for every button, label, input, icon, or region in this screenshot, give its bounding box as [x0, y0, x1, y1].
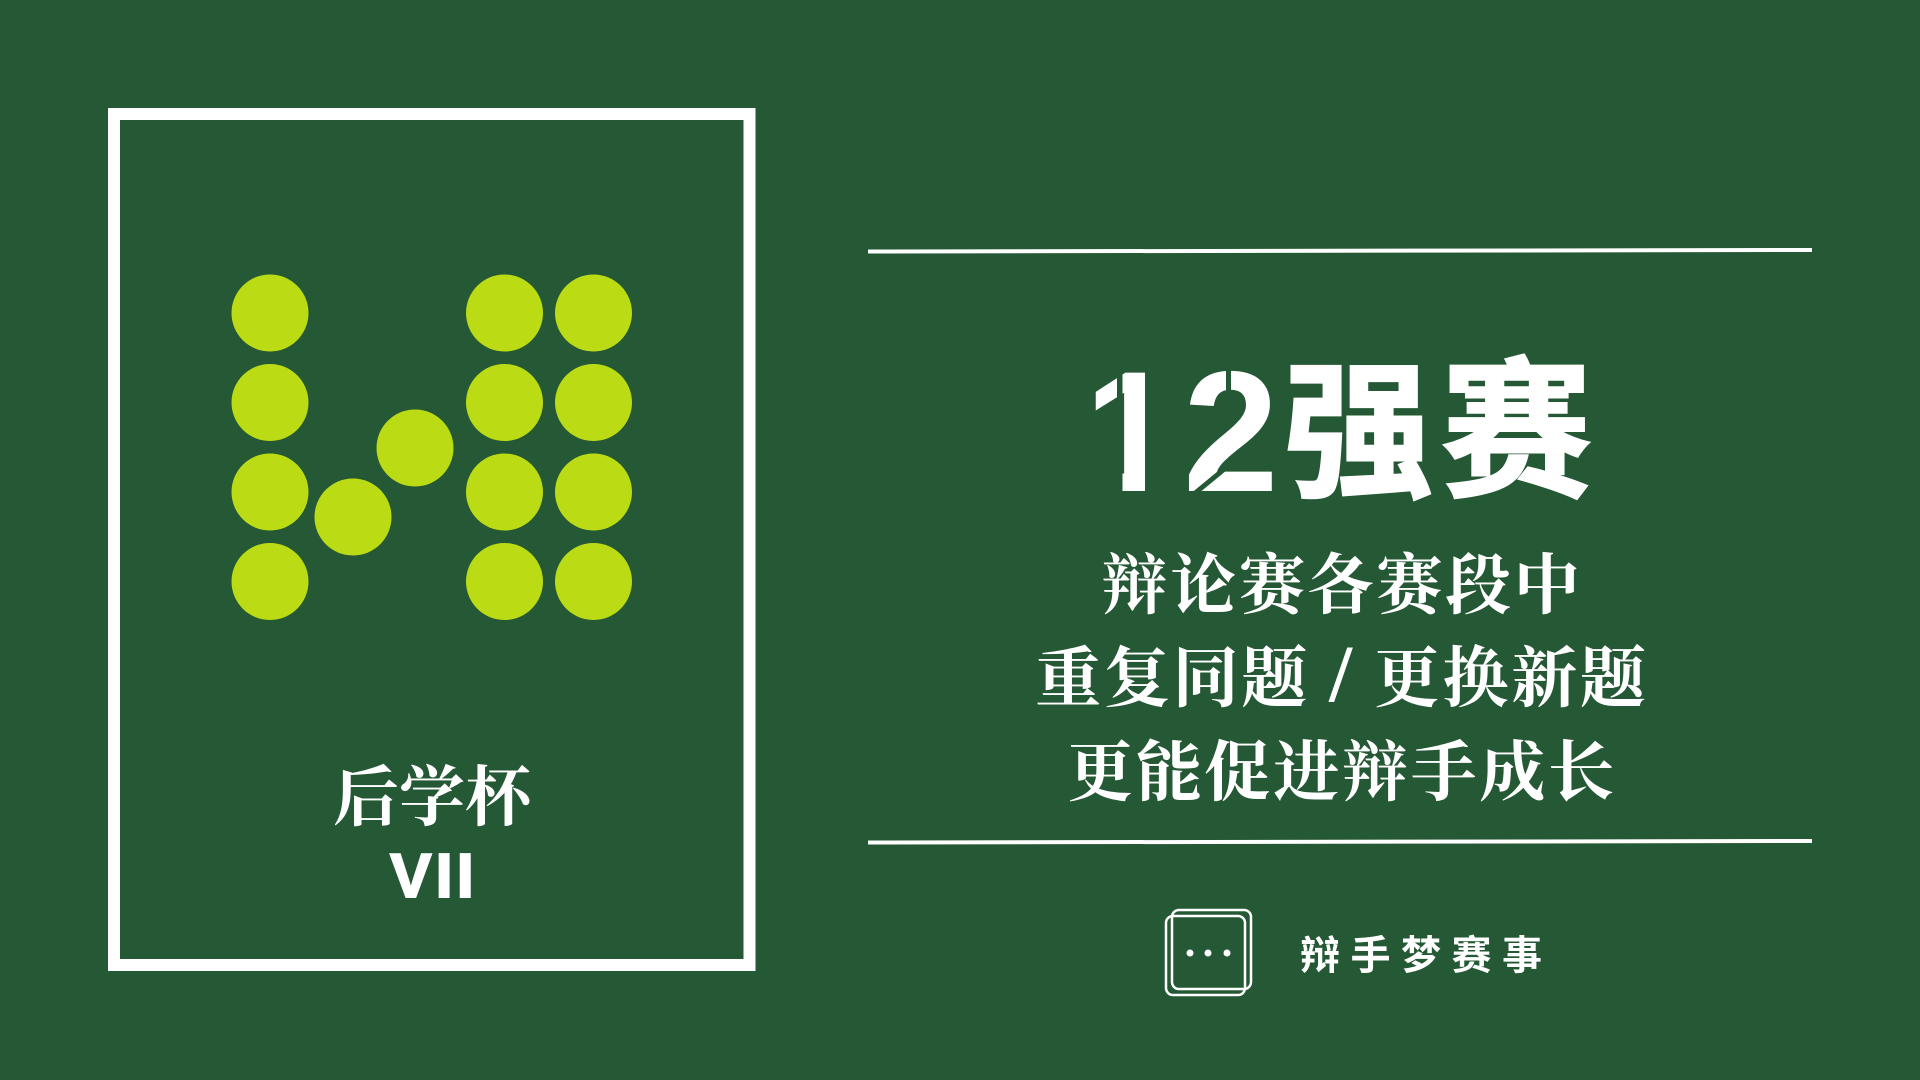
body text: 辩论赛各赛段中: [1102, 550, 1582, 623]
title: 12 strong round: 2: [1183, 336, 1279, 528]
icon: chat account logo: [1166, 910, 1251, 995]
cup name: 后学杯: [333, 762, 536, 835]
title: 12 strong round: 1: [1084, 336, 1180, 528]
account name: 辩手梦赛事: [1300, 934, 1552, 978]
title: 12 strong round: 强: [1284, 350, 1433, 517]
bottom divider: [868, 841, 1812, 842]
panel: tournament poster frame: [114, 114, 750, 965]
body text: 重复同题 / 更换新题: [1035, 628, 1649, 719]
icon: dotted H logo: [232, 274, 632, 620]
title: 12 strong round: [1066, 336, 1592, 528]
body text: [1035, 550, 1649, 810]
cup edition numeral: VII: [390, 842, 478, 911]
top divider: [868, 250, 1812, 252]
title: 12 strong round: 赛: [1441, 348, 1592, 517]
body text: 更能促进辩手成长: [1067, 737, 1617, 810]
